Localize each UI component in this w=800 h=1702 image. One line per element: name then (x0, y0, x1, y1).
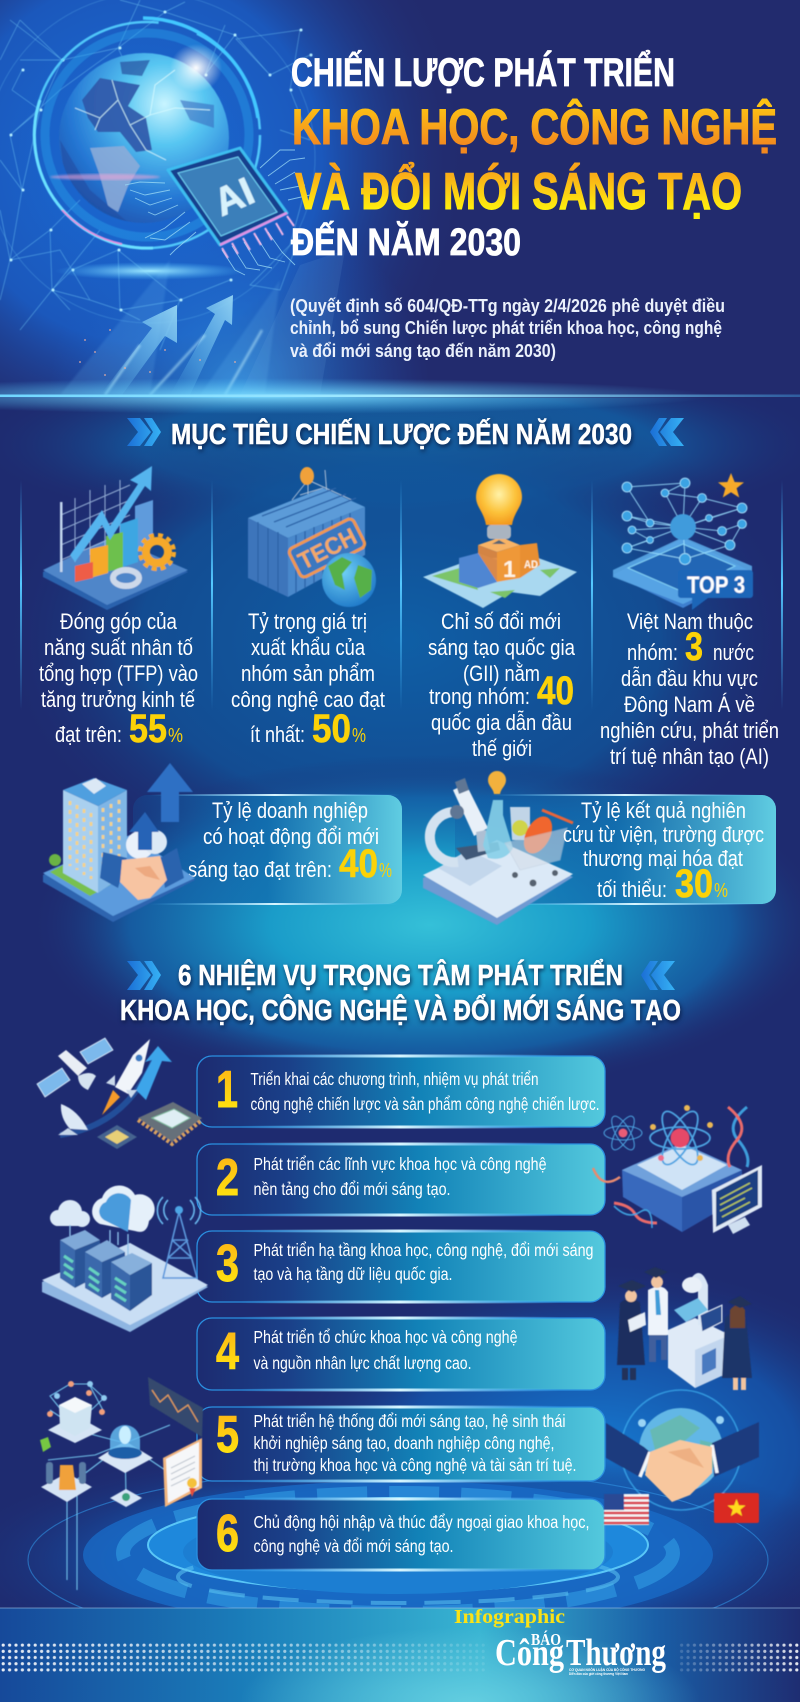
task 6: công nghệ và đổi mới sáng tạo. (254, 1536, 454, 1556)
task 3 (197, 1230, 605, 1304)
icon: light bulb on podium and map (423, 474, 577, 608)
task 1 (197, 1054, 605, 1128)
title: CHIẾN LƯỢC PHÁT TRIỂN (291, 48, 675, 95)
task 5 (197, 1406, 605, 1482)
logo: Báo Công Thương: BÁO (531, 1630, 561, 1649)
holographic rings (34, 18, 260, 248)
task 4: và nguồn nhân lực chất lượng cao. (254, 1353, 472, 1373)
text: high-tech exports: xuất khẩu của (251, 635, 366, 660)
task 6 (197, 1498, 605, 1572)
text: TFP contribution: tổng hợp (TFP) vào (39, 661, 198, 686)
task 5: thị trường khoa học và công nghệ và tài sản trí tuệ. (254, 1455, 576, 1475)
panel: enterprise innovation rate: 40 (339, 842, 378, 886)
subtitle: decision reference (290, 295, 725, 361)
text: GII ranking (428, 609, 576, 761)
dotted pattern (0, 1642, 800, 1673)
text: GII ranking: (GII) nằm (463, 661, 540, 686)
icon: innovation ecosystem network (40, 1377, 203, 1590)
text: top 3 in AI: trí tuệ nhân tạo (AI) (610, 744, 769, 769)
task 5: khởi nghiệp sáng tạo, doanh nghiệp công nghệ, (254, 1433, 554, 1453)
list of six tasks (197, 1054, 605, 1572)
text: TFP contribution: năng suất nhân tố (44, 635, 193, 660)
panel: commercialized research rate (455, 794, 776, 905)
text: commercialized research rate: % (714, 880, 728, 902)
text: top 3 in AI: 3 (685, 625, 703, 669)
text: high-tech exports: ít nhất: (250, 722, 305, 747)
icon: graduates and lab equipment (617, 1267, 752, 1390)
icon: atom on platform, DNA and monitor (593, 1105, 762, 1234)
logo: Báo Công Thương: Công (495, 1632, 564, 1674)
text: GII ranking: 40 (537, 669, 574, 713)
infographic label: Infographic (454, 1606, 565, 1628)
hero banner with globe and AI chip (0, 0, 684, 398)
text: high-tech exports: 50 (312, 707, 351, 751)
text: high-tech exports: nhóm sản phẩm (241, 661, 375, 686)
icon: AI chip: AI (208, 170, 261, 225)
icon: light bulb on podium and map: 1 (503, 556, 516, 582)
text: commercialized research rate: tối thiểu: (597, 877, 667, 902)
text: high-tech exports (231, 609, 385, 751)
task 4: 4 (216, 1323, 239, 1381)
text: GII ranking: trong nhóm: (429, 684, 530, 709)
section heading: six key tasks (120, 958, 681, 1027)
task 6: Chủ động hội nhập và thúc đẩy ngoại giao khoa học, (254, 1512, 590, 1532)
text: commercialized research rate (563, 798, 764, 906)
icon: left chevrons (650, 418, 684, 446)
icon: AI network and top 3 badge (613, 473, 753, 610)
subtitle: decision reference: chỉnh, bổ sung Chiến lược phát triển khoa học, công nghệ (290, 317, 722, 338)
panel: enterprise innovation rate: có hoạt động đổi mới (203, 824, 379, 849)
task 4: Phát triển tổ chức khoa học và công nghệ (254, 1327, 518, 1347)
icon: satellite, rocket and chips (37, 1038, 202, 1149)
icon: data servers, cloud and antenna tower (42, 1186, 208, 1332)
icon: right chevrons (127, 418, 161, 446)
text: commercialized research rate: 30 (675, 862, 713, 906)
task 6: 6 (216, 1505, 239, 1563)
task 1: Triển khai các chương trình, nhiệm vụ phát triển (250, 1069, 538, 1089)
section heading: six key tasks: KHOA HỌC, CÔNG NGHỆ VÀ ĐỔI MỚI SÁNG TẠO (120, 993, 681, 1027)
icon: AI network and top 3 badge: TOP 3 (687, 572, 745, 599)
text: high-tech exports: Tỷ trọng giá trị (248, 609, 367, 634)
logo: Báo Công Thương (495, 1630, 666, 1676)
text: top 3 in AI (600, 609, 779, 769)
title (291, 48, 777, 264)
text: commercialized research rate: Tỷ lệ kết quả nghiên (581, 798, 746, 823)
task 1: công nghệ chiến lược và sản phẩm công nghệ chiến lược. (250, 1094, 600, 1114)
task 5: Phát triển hệ thống đổi mới sáng tạo, hệ sinh thái (254, 1411, 566, 1431)
text: commercialized research rate: thương mại hóa đạt (583, 846, 743, 871)
subtitle: decision reference: (Quyết định số 604/QĐ-TTg ngày 2/4/2026 phê duyệt điều (290, 295, 725, 316)
icon: office building and handshake (43, 763, 195, 922)
icon: left chevrons (641, 961, 675, 990)
section heading: six key tasks: 6 NHIỆM VỤ TRỌNG TÂM PHÁT TRIỂN (178, 958, 623, 992)
text: GII ranking: Chỉ số đổi mới (441, 609, 561, 634)
panel: enterprise innovation rate: Tỷ lệ doanh nghiệp (212, 798, 368, 823)
logo: Báo Công Thương: CƠ QUAN NGÔN LUẬN CỦA BỘ CÔNG THƯƠNG (569, 1667, 645, 1672)
section heading: strategic goals: MỤC TIÊU CHIẾN LƯỢC ĐẾN NĂM 2030 (171, 417, 632, 451)
icon: handshake over globe with flags (604, 1390, 759, 1525)
icon: export container with globe (248, 467, 376, 607)
text: TFP contribution (39, 609, 198, 751)
growth arrows (60, 250, 345, 395)
text: high-tech exports: công nghệ cao đạt (231, 687, 385, 712)
title: ĐẾN NĂM 2030 (291, 220, 521, 264)
decorative tech rings at bottom (27, 1480, 768, 1608)
icon: export container with globe: TECH (294, 523, 361, 575)
task 3: 3 (216, 1235, 239, 1293)
text: GII ranking: sáng tạo quốc gia (428, 635, 576, 660)
icon: microscope, flask and shopping cart (423, 771, 573, 925)
task 2: Phát triển các lĩnh vực khoa học và công nghệ (254, 1154, 546, 1174)
task 4 (197, 1316, 605, 1392)
text: top 3 in AI: Đông Nam Á về (624, 692, 755, 717)
icon: right chevrons (127, 961, 161, 990)
icon: AI chip (168, 148, 294, 258)
panel: enterprise innovation rate (133, 794, 402, 905)
text: TFP contribution: Đóng góp của (60, 609, 178, 634)
task 2: nền tảng cho đổi mới sáng tạo. (254, 1179, 450, 1199)
text: GII ranking: thế giới (472, 736, 532, 761)
text: top 3 in AI: dẫn đầu khu vực (621, 666, 758, 691)
task 2: 2 (216, 1149, 239, 1207)
panel: enterprise innovation rate: % (379, 860, 392, 882)
task 2 (197, 1142, 605, 1216)
icon: Vietnam flag (714, 1493, 759, 1523)
text: high-tech exports: % (352, 725, 366, 747)
footer band (0, 1606, 800, 1702)
text: GII ranking: quốc gia dẫn đầu (431, 710, 572, 735)
panel: enterprise innovation rate: sáng tạo đạt trên: (188, 857, 332, 882)
task 3: tạo và hạ tầng dữ liệu quốc gia. (254, 1264, 452, 1284)
subtitle: decision reference: và đổi mới sáng tạo đến năm 2030) (290, 340, 556, 361)
globe (59, 44, 229, 224)
data network sphere (0, 0, 315, 350)
icon: chart with rising arrow (43, 466, 188, 610)
icon: United States flag (604, 1494, 649, 1525)
text: top 3 in AI: nước (713, 640, 754, 665)
task 5: 5 (216, 1406, 239, 1464)
text: TFP contribution: % (168, 725, 183, 747)
lens flares (50, 174, 245, 280)
text: TFP contribution: đạt trên: (55, 722, 122, 747)
text: TFP contribution: tăng trưởng kinh tế (41, 687, 195, 712)
text: top 3 in AI: Việt Nam thuộc (627, 609, 753, 634)
task 3: Phát triển hạ tầng khoa học, công nghệ, đổi mới sáng (254, 1240, 594, 1260)
task 1: 1 (216, 1061, 238, 1119)
logo: Báo Công Thương: Diễn đàn của giới công thương Việt Nam (569, 1671, 628, 1676)
icon: light bulb on podium and map: AD (524, 559, 538, 571)
text: TFP contribution: 55 (129, 707, 167, 751)
circuit traces (125, 150, 310, 275)
text: top 3 in AI: nhóm: (627, 640, 678, 665)
logo: Báo Công Thương: Thương (566, 1632, 666, 1674)
